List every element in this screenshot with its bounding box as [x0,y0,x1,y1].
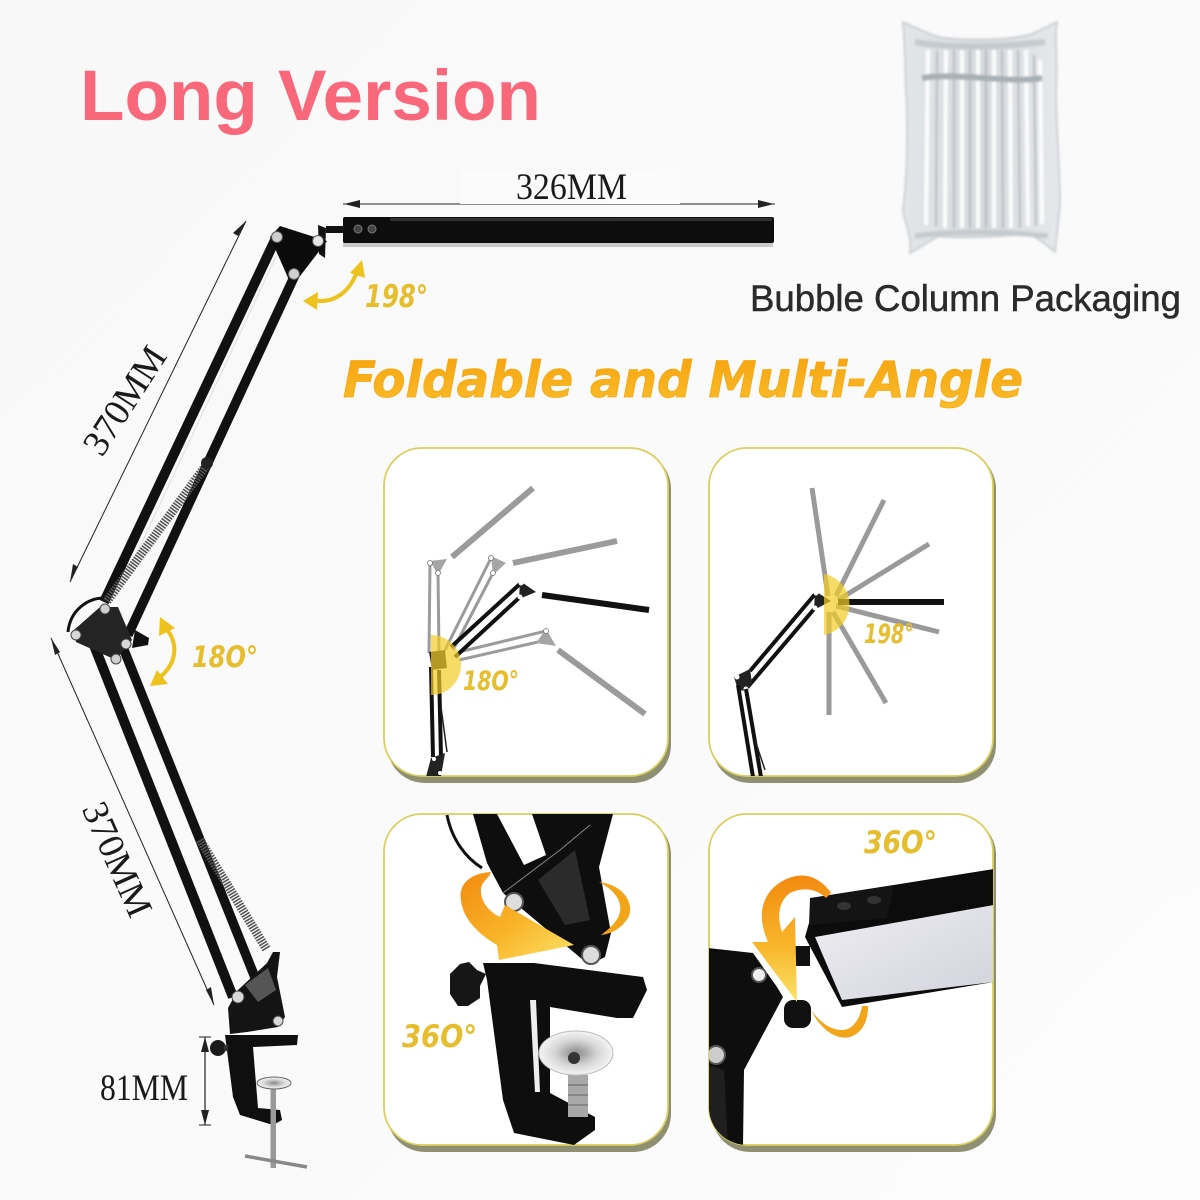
panel: 360 degree head rotation [707,814,996,1152]
label 180: 18O° [463,666,519,697]
orange rotation arrow [752,876,831,1002]
grey head positions [812,488,939,715]
dimension: lower 370MM: 370MM [73,796,160,923]
dimension: lower 370MM [51,638,214,1005]
heading: Foldable and Multi-Angle [343,351,1023,409]
icon: bubble column packaging [903,22,1060,253]
lower arm [88,630,267,997]
dimension: 326MM [343,167,775,208]
upper arm [104,238,295,635]
yellow 180 sector [431,635,461,695]
arm photo [473,814,613,965]
yellow 198 sector [824,574,849,635]
dimension: upper 370MM [70,221,246,582]
clamp [483,963,647,1145]
black arm position [426,580,649,777]
arrow: 198 degree head rotation: 198° [365,279,428,315]
label 198: 198° [864,619,914,650]
dimension: upper 370MM: 370MM [75,339,175,463]
dimension: 81MM [100,1037,211,1125]
label 360: 36O° [402,1019,477,1055]
light bar [326,217,774,247]
black arm and head [734,590,944,777]
grey arm positions [429,488,645,714]
arrow: 180 degree elbow rotation [150,617,258,686]
dimension: 326MM: 326MM [516,167,627,208]
base joint and clamp [210,952,307,1168]
label 360: 36O° [864,825,937,861]
dimension: 81MM: 81MM [100,1068,188,1109]
title: Long Version [80,57,541,136]
bolts [505,893,523,911]
crescent arrow tail [811,1006,868,1038]
upper joint [270,225,327,280]
panel: 360 degree base rotation [384,814,671,1152]
light head [805,869,994,1007]
steel screw [568,1075,588,1117]
packaging caption: Bubble Column Packaging [750,278,1181,319]
arm photo [708,948,783,1146]
panel: 198 degree head swing [709,448,996,783]
panel: 180 degree arm swing [384,448,671,783]
arrow: 180 degree elbow rotation: 18O° [192,640,258,674]
elbow joint [68,598,149,664]
arrow: 198 degree head rotation [303,260,428,315]
orange rotation arrow [461,872,574,960]
cable [447,815,482,868]
lamp: full assembled arm [68,217,774,1168]
